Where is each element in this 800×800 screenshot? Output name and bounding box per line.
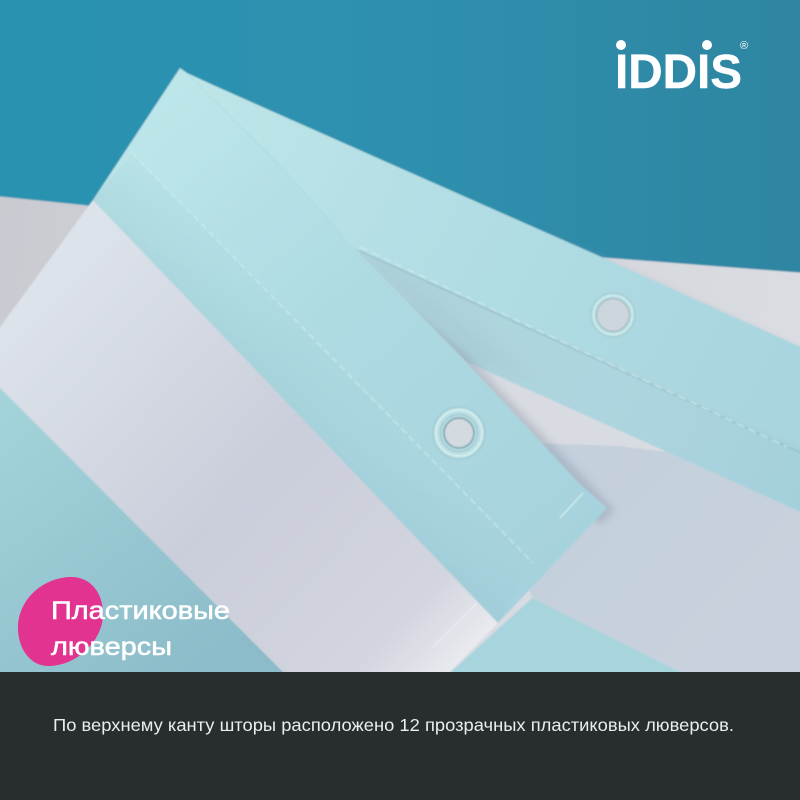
- front folded strip: [93, 68, 607, 623]
- grommet: front: [433, 407, 485, 459]
- heading: plastic grommets: [51, 597, 230, 661]
- front strip side shading: [93, 153, 533, 623]
- lower left aqua stripe: [0, 383, 291, 680]
- pink blob accent: [18, 577, 103, 666]
- white stripe of back fabric: [0, 196, 800, 680]
- heading: plastic grommets: Пластиковые: [51, 597, 230, 625]
- front strip stitching: [132, 153, 533, 563]
- white stripe on front panel: [0, 200, 498, 680]
- bottom description bar: [0, 672, 800, 800]
- description text: По верхнему канту шторы расположено 12 прозрачных пластиковых люверсов.: [53, 715, 734, 735]
- grommet: back: [591, 293, 635, 337]
- shadow under upper hem: [540, 232, 800, 360]
- strip end stitching: [560, 493, 583, 518]
- shadow under front strip: [400, 300, 615, 525]
- lower hem band: [353, 247, 800, 514]
- hem stitching: [360, 247, 787, 447]
- teal background fabric: [0, 0, 800, 400]
- lower right aqua stripe: [442, 598, 696, 680]
- lower right white wedge: [440, 340, 800, 680]
- lower right tinted panel: [500, 443, 800, 680]
- logo: IDDIS: IDDIS: [615, 46, 742, 99]
- hem edge line: [360, 251, 800, 455]
- heading: plastic grommets: люверсы: [51, 633, 172, 661]
- band shading near fold: [353, 247, 540, 380]
- bottom hem seam on white: [433, 603, 477, 647]
- upper hem band: [187, 73, 800, 449]
- logo: IDDIS: ®: [740, 40, 748, 52]
